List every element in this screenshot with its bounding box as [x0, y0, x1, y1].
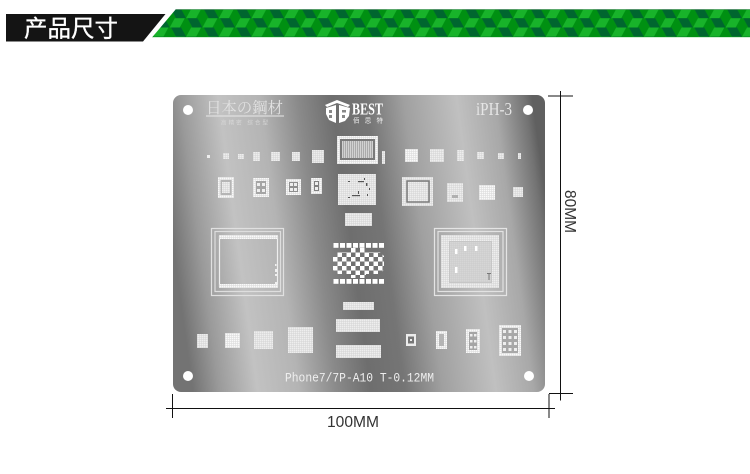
- header title: 产品尺寸: [24, 16, 118, 42]
- model code: iPH-3: [476, 99, 512, 119]
- right large CPU outline: [434, 228, 506, 296]
- bottom row chips right: [406, 325, 521, 356]
- second row ring chips left: [218, 177, 322, 198]
- BEST logo: BEST: [352, 100, 383, 118]
- second row chips right: [402, 177, 523, 206]
- stencil plate: [173, 95, 545, 392]
- mounting holes: [183, 105, 534, 381]
- checkerboard BGA chip: [333, 243, 384, 284]
- left large CPU outline: [212, 228, 284, 296]
- lower center grid blocks: [336, 302, 381, 358]
- top row small chips left: [207, 150, 324, 163]
- green cube pattern band: [152, 9, 750, 38]
- center grid block: [345, 213, 372, 226]
- bottom row chips left: [197, 327, 313, 353]
- height dimension: 80MM: 80MM: [561, 190, 578, 233]
- plate caption: Phone7/7P-A10 T-0.12MM: [285, 372, 434, 386]
- top row small chips right: [405, 149, 521, 162]
- Japanese steel brand mark: 高精密 综合型: [221, 118, 268, 126]
- width dimension: 100MM: 100MM: [327, 414, 379, 431]
- Japanese steel brand mark: 日本の鋼材: [206, 99, 283, 117]
- top center chip: [337, 136, 385, 164]
- BEST logo: 佰思特: [353, 116, 384, 124]
- BEST logo: [325, 100, 384, 124]
- header label bar: [6, 14, 166, 42]
- Japanese steel brand mark: [206, 99, 284, 126]
- center marked chip: [338, 174, 376, 205]
